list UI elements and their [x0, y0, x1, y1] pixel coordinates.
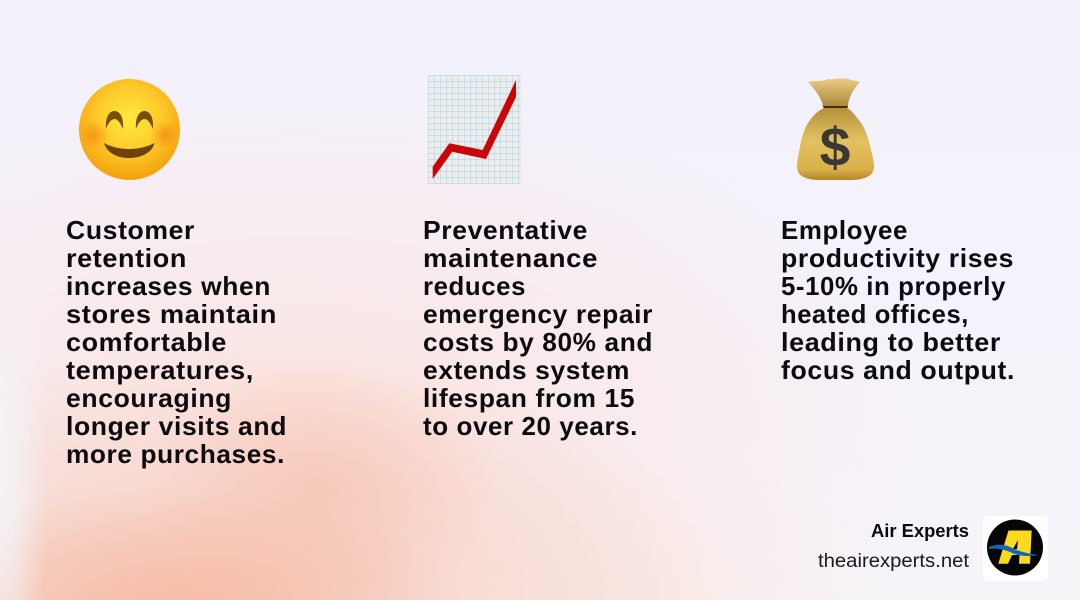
text block: preventative maintenance: lifespan from 15 — [423, 383, 635, 413]
website: theairexperts.net — [818, 551, 970, 572]
text block: customer retention: retention — [66, 243, 187, 273]
icon: money bag emoji — [797, 78, 874, 180]
text block: employee productivity: focus and output. — [781, 355, 1015, 385]
text block: customer retention: encouraging — [66, 383, 232, 413]
text block: employee productivity: Employee — [781, 215, 908, 245]
text block: employee productivity — [781, 215, 1015, 385]
text block: preventative maintenance: maintenance — [423, 243, 598, 273]
text block: customer retention: temperatures, — [66, 355, 254, 385]
text block: customer retention: more purchases. — [66, 439, 285, 469]
text block: employee productivity: 5-10% in properly — [781, 271, 1006, 301]
text block: preventative maintenance: reduces — [423, 271, 526, 301]
text block: preventative maintenance: emergency repair — [423, 299, 653, 329]
text block: employee productivity: leading to better — [781, 327, 1001, 357]
text block: customer retention: Customer — [66, 215, 195, 245]
text block: customer retention: comfortable — [66, 327, 227, 357]
text block: preventative maintenance: costs by 80% and — [423, 327, 653, 357]
text block: employee productivity: productivity rises — [781, 243, 1014, 273]
text block: customer retention: longer visits and — [66, 411, 287, 441]
text block: preventative maintenance: extends system — [423, 355, 630, 385]
icon: smiling face emoji — [79, 79, 180, 180]
text block: preventative maintenance — [423, 215, 653, 441]
text block: customer retention: increases when — [66, 271, 271, 301]
text block: customer retention: stores maintain — [66, 299, 277, 329]
text block: customer retention — [66, 215, 287, 469]
brand name: Air Experts — [871, 521, 969, 541]
text block: preventative maintenance: to over 20 years. — [423, 411, 638, 441]
text block: preventative maintenance: Preventative — [423, 215, 588, 245]
logo: Air Experts — [983, 516, 1048, 581]
icon: chart increasing emoji — [428, 75, 521, 184]
icon: money bag emoji: $ — [820, 116, 850, 178]
text block: employee productivity: heated offices, — [781, 299, 969, 329]
